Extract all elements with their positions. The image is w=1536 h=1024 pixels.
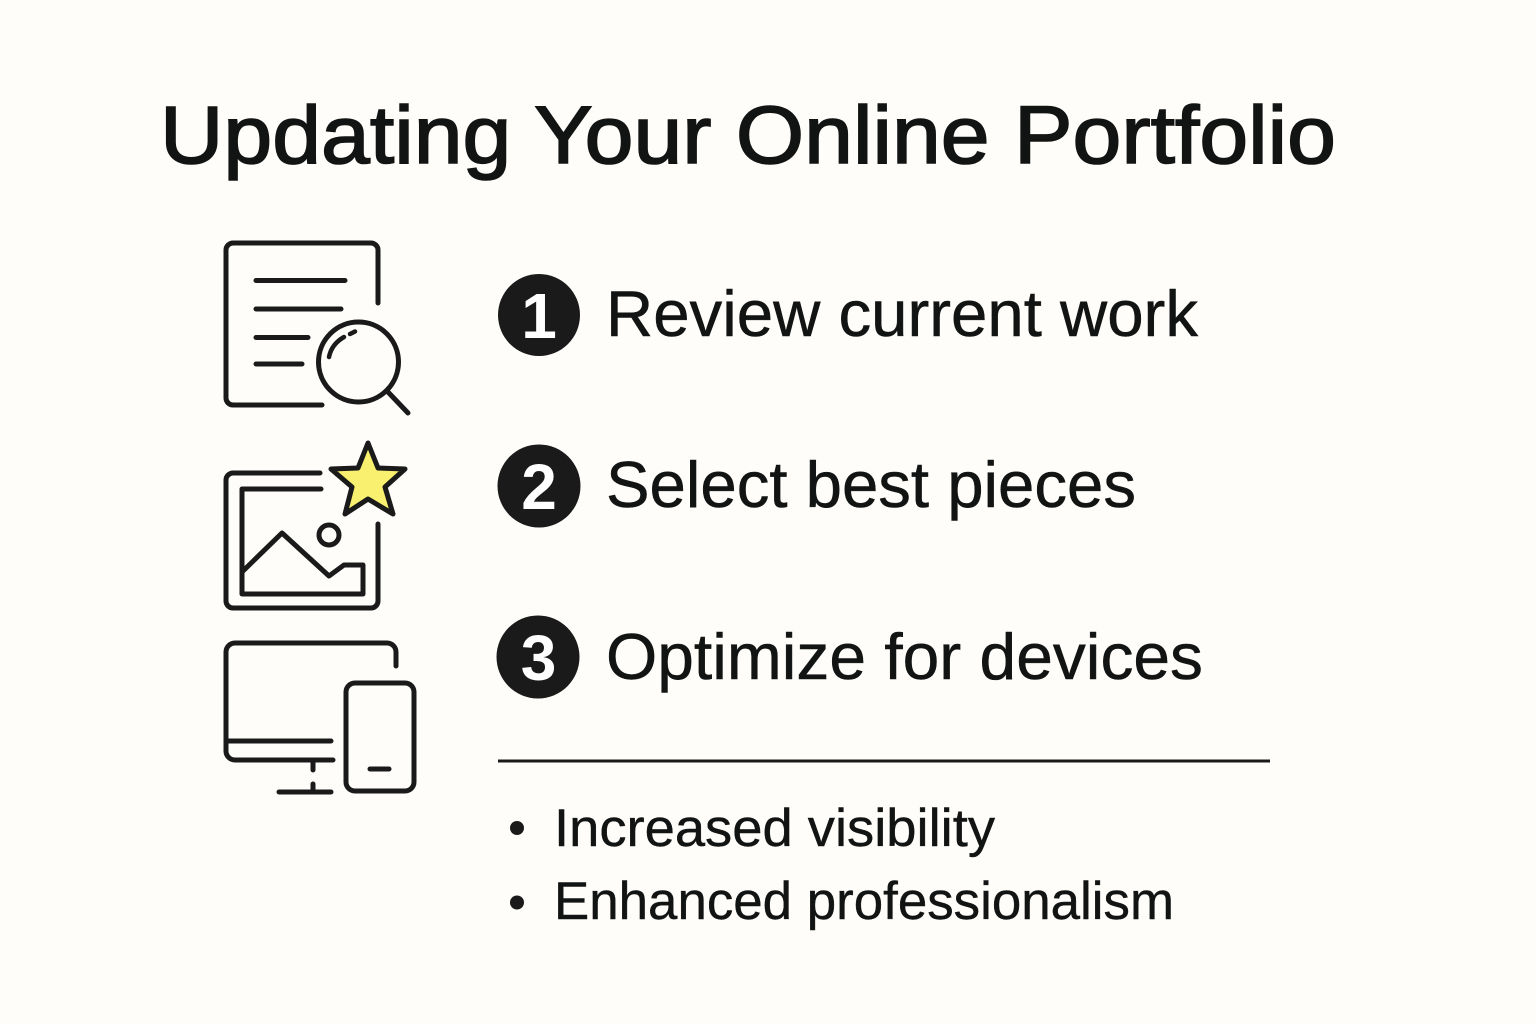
divider [498, 760, 1270, 762]
number badge 2: 2 [521, 451, 557, 523]
icon: desktop and phone [226, 643, 414, 792]
step 3 [496, 616, 1203, 698]
icon: yellow star [331, 443, 405, 514]
number badge 3: 3 [521, 622, 556, 694]
number badge 3 [496, 616, 580, 698]
number badge 1 [498, 274, 580, 356]
icon: image with star [226, 443, 405, 608]
step 2 [498, 444, 1136, 528]
number badge 2 [498, 444, 580, 528]
number badge 1: 1 [521, 280, 557, 352]
benefit: enhanced professionalism: Enhanced professionalism [554, 872, 1174, 931]
step 1 [498, 274, 1198, 356]
icon: document with magnifying glass [226, 243, 408, 413]
benefit: increased visibility: Increased visibility [554, 799, 996, 858]
step 3 label: Optimize for devices [606, 620, 1203, 693]
step 2 label: Select best pieces [606, 448, 1136, 521]
title: Updating Your Online Portfolio [160, 90, 1336, 181]
step 1 label: Review current work [606, 277, 1198, 350]
